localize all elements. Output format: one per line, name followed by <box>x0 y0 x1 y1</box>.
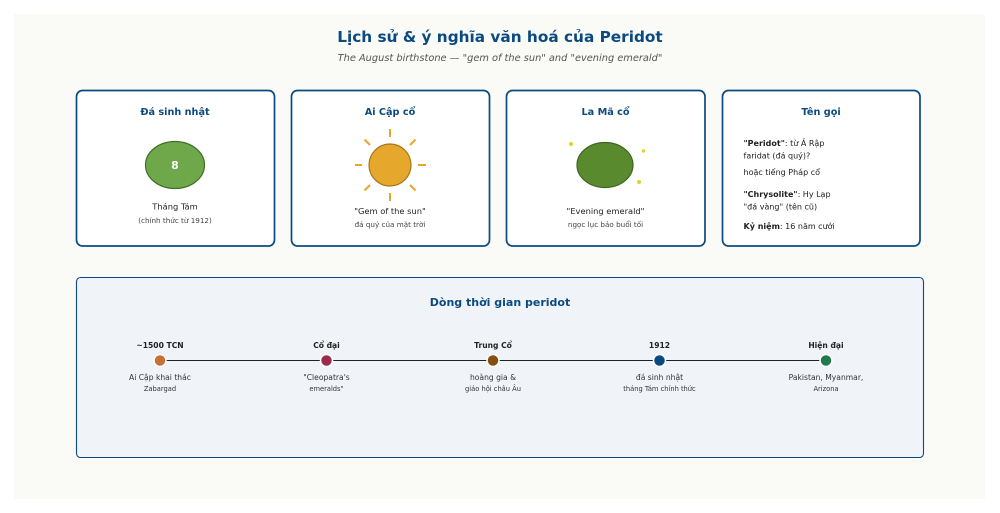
heading: timeline: Dòng thời gian peridot <box>430 296 570 309</box>
panel: timeline <box>76 278 924 458</box>
panel: names <box>722 90 920 246</box>
text: etymology list: "đá vàng" (tên cũ) <box>744 202 817 212</box>
heading: names: Tên gọi <box>801 106 841 118</box>
event: 1912 <box>623 341 696 393</box>
text: etymology list: Kỷ niệm: 16 năm cưới <box>744 221 835 231</box>
panel: ancient Rome <box>506 90 705 246</box>
event: 1500 BCE: Zabargad <box>144 385 176 393</box>
heading: ancient Egypt: Ai Cập cổ <box>365 105 416 118</box>
event: present day: Arizona <box>813 385 839 393</box>
event: 1912: 1912 <box>649 341 670 350</box>
event: 1500 BCE: ~1500 TCN <box>136 341 184 350</box>
text: evening emerald translation: ngọc lục bảo buổi tối <box>568 220 643 229</box>
event: 1912: đá sinh nhật <box>636 373 683 382</box>
event: antiquity: Cổ đại <box>313 341 340 350</box>
text: etymology list <box>744 137 835 231</box>
icon: green gem with number 8: 8 <box>171 159 179 172</box>
text: etymology list: faridat (đá quý)? <box>744 152 810 160</box>
icon: green gem with number 8 <box>146 142 204 188</box>
subtitle: The August birthstone — "gem of the sun" and "evening emerald" <box>338 53 662 64</box>
event: middle ages: hoàng gia & <box>470 373 516 382</box>
event: 1500 BCE: Ai Cập khai thác <box>129 373 191 382</box>
event: middle ages <box>465 341 521 393</box>
text: official since: (chính thức từ 1912) <box>138 216 212 225</box>
event: middle ages: Trung Cổ <box>474 341 513 350</box>
panel: birthstone <box>76 90 274 246</box>
text: evening emerald: "Evening emerald" <box>567 206 645 216</box>
icon: evening emerald gem with stars <box>569 142 645 188</box>
event: antiquity: emeralds" <box>309 385 344 393</box>
event: middle ages: giáo hội châu Âu <box>465 384 521 393</box>
text: month: Tháng Tám <box>151 202 198 212</box>
event: antiquity <box>303 341 350 393</box>
text: etymology list: hoặc tiếng Pháp cổ <box>744 167 820 178</box>
icon: sun with rays <box>355 129 426 201</box>
text: gem of the sun translation: đá quý của mặt trời <box>355 220 425 229</box>
text: etymology list: "Peridot": từ Ả Rập <box>744 137 824 149</box>
event: antiquity: "Cleopatra's <box>303 373 350 382</box>
heading: ancient Rome: La Mã cổ <box>581 105 630 118</box>
event: present day: Pakistan, Myanmar, <box>789 373 863 382</box>
event: 1500 BCE <box>129 341 191 393</box>
panel: ancient Egypt <box>292 90 490 246</box>
event: present day <box>789 341 863 393</box>
event: 1912: tháng Tám chính thức <box>623 385 696 393</box>
event: present day: Hiện đại <box>808 341 844 350</box>
text: etymology list: "Chrysolite": Hy Lạp <box>744 190 831 200</box>
text: gem of the sun: "Gem of the sun" <box>354 206 426 216</box>
timeline axis <box>160 360 826 362</box>
heading: birthstone: Đá sinh nhật <box>140 106 210 118</box>
title: Lịch sử & ý nghĩa văn hoá của Peridot <box>337 28 663 46</box>
